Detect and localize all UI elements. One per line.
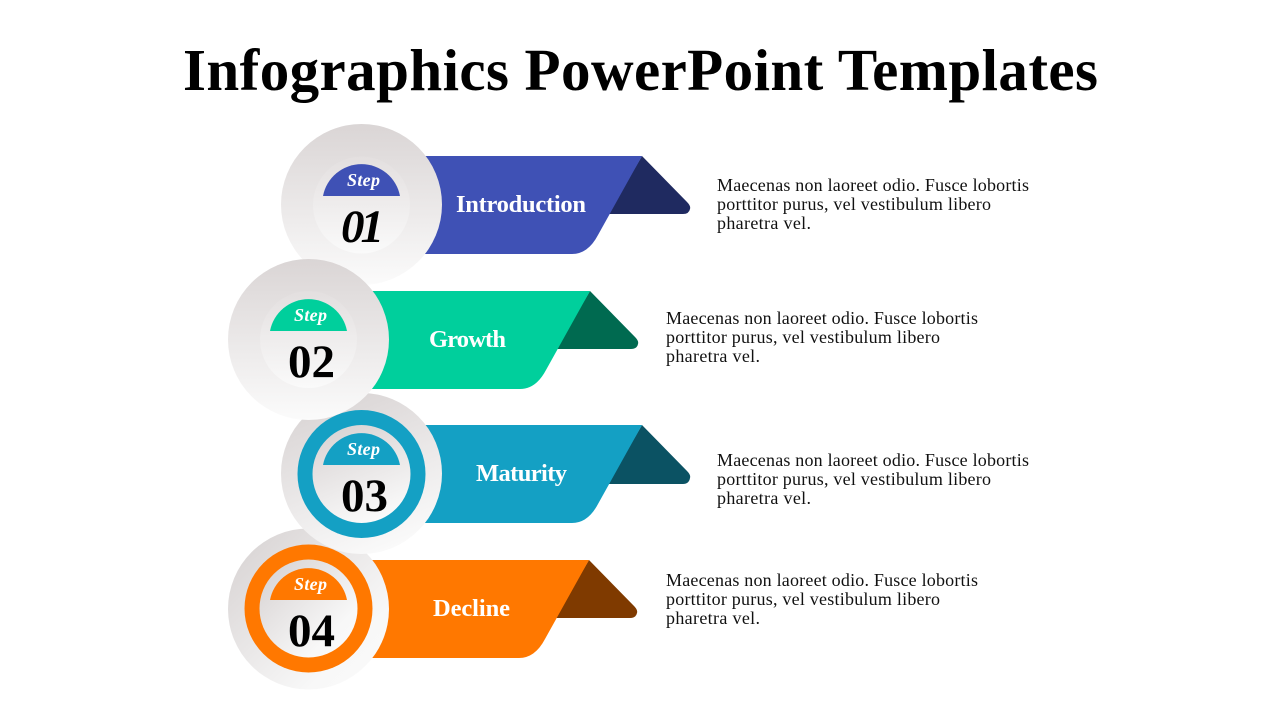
badge: step 2: Step [294, 305, 327, 325]
ribbon: step 1 [400, 156, 642, 254]
label: Decline: Decline [433, 595, 510, 622]
ribbon fold: step 3 [608, 425, 690, 484]
ribbon: step 2 [348, 291, 590, 389]
label: Introduction: Introduction [456, 191, 586, 218]
badge: step 3 [281, 393, 442, 554]
description: step 2: Maecenas non laoreet odio. Fusce lobortis [666, 308, 978, 328]
ribbon: step 3 [400, 425, 642, 523]
badge: step 2: 02 [288, 336, 335, 388]
badge: step 4 [228, 528, 389, 690]
ribbon: step 4 [347, 560, 589, 658]
ribbon fold: step 1 [608, 156, 690, 214]
badge: step 1 [281, 124, 442, 285]
description: step 3: pharetra vel. [717, 488, 811, 508]
label: Maturity: Maturity [476, 460, 568, 487]
badge: step 4: 04 [288, 605, 335, 657]
description: step 4: Maecenas non laoreet odio. Fusce lobortis [666, 570, 978, 590]
description: step 4: pharetra vel. [666, 608, 760, 628]
description: step 1: Maecenas non laoreet odio. Fusce lobortis [717, 175, 1029, 195]
description: step 1: pharetra vel. [717, 213, 811, 233]
ribbon fold: step 2 [556, 291, 638, 349]
badge: step 4: Step [294, 574, 327, 594]
step 3 [281, 393, 1029, 554]
step 4 [228, 528, 978, 690]
badge: step 3: Step [347, 439, 380, 459]
badge: step 2 [228, 259, 389, 420]
description: step 2: pharetra vel. [666, 346, 760, 366]
badge: step 1: 01 [341, 201, 384, 253]
title: Infographics PowerPoint Templates [183, 37, 1098, 103]
badge: step 1: Step [347, 170, 380, 190]
description: step 1: porttitor purus, vel vestibulum libero [717, 194, 991, 214]
step 1 [281, 124, 1029, 285]
description: step 3: porttitor purus, vel vestibulum libero [717, 469, 991, 489]
label: Growth: Growth [429, 326, 506, 353]
description: step 2: porttitor purus, vel vestibulum libero [666, 327, 940, 347]
step 2 [228, 259, 978, 420]
description: step 4: porttitor purus, vel vestibulum libero [666, 589, 940, 609]
badge: step 3: 03 [341, 470, 388, 522]
ribbon fold: step 4 [555, 560, 637, 618]
description: step 3: Maecenas non laoreet odio. Fusce lobortis [717, 450, 1029, 470]
